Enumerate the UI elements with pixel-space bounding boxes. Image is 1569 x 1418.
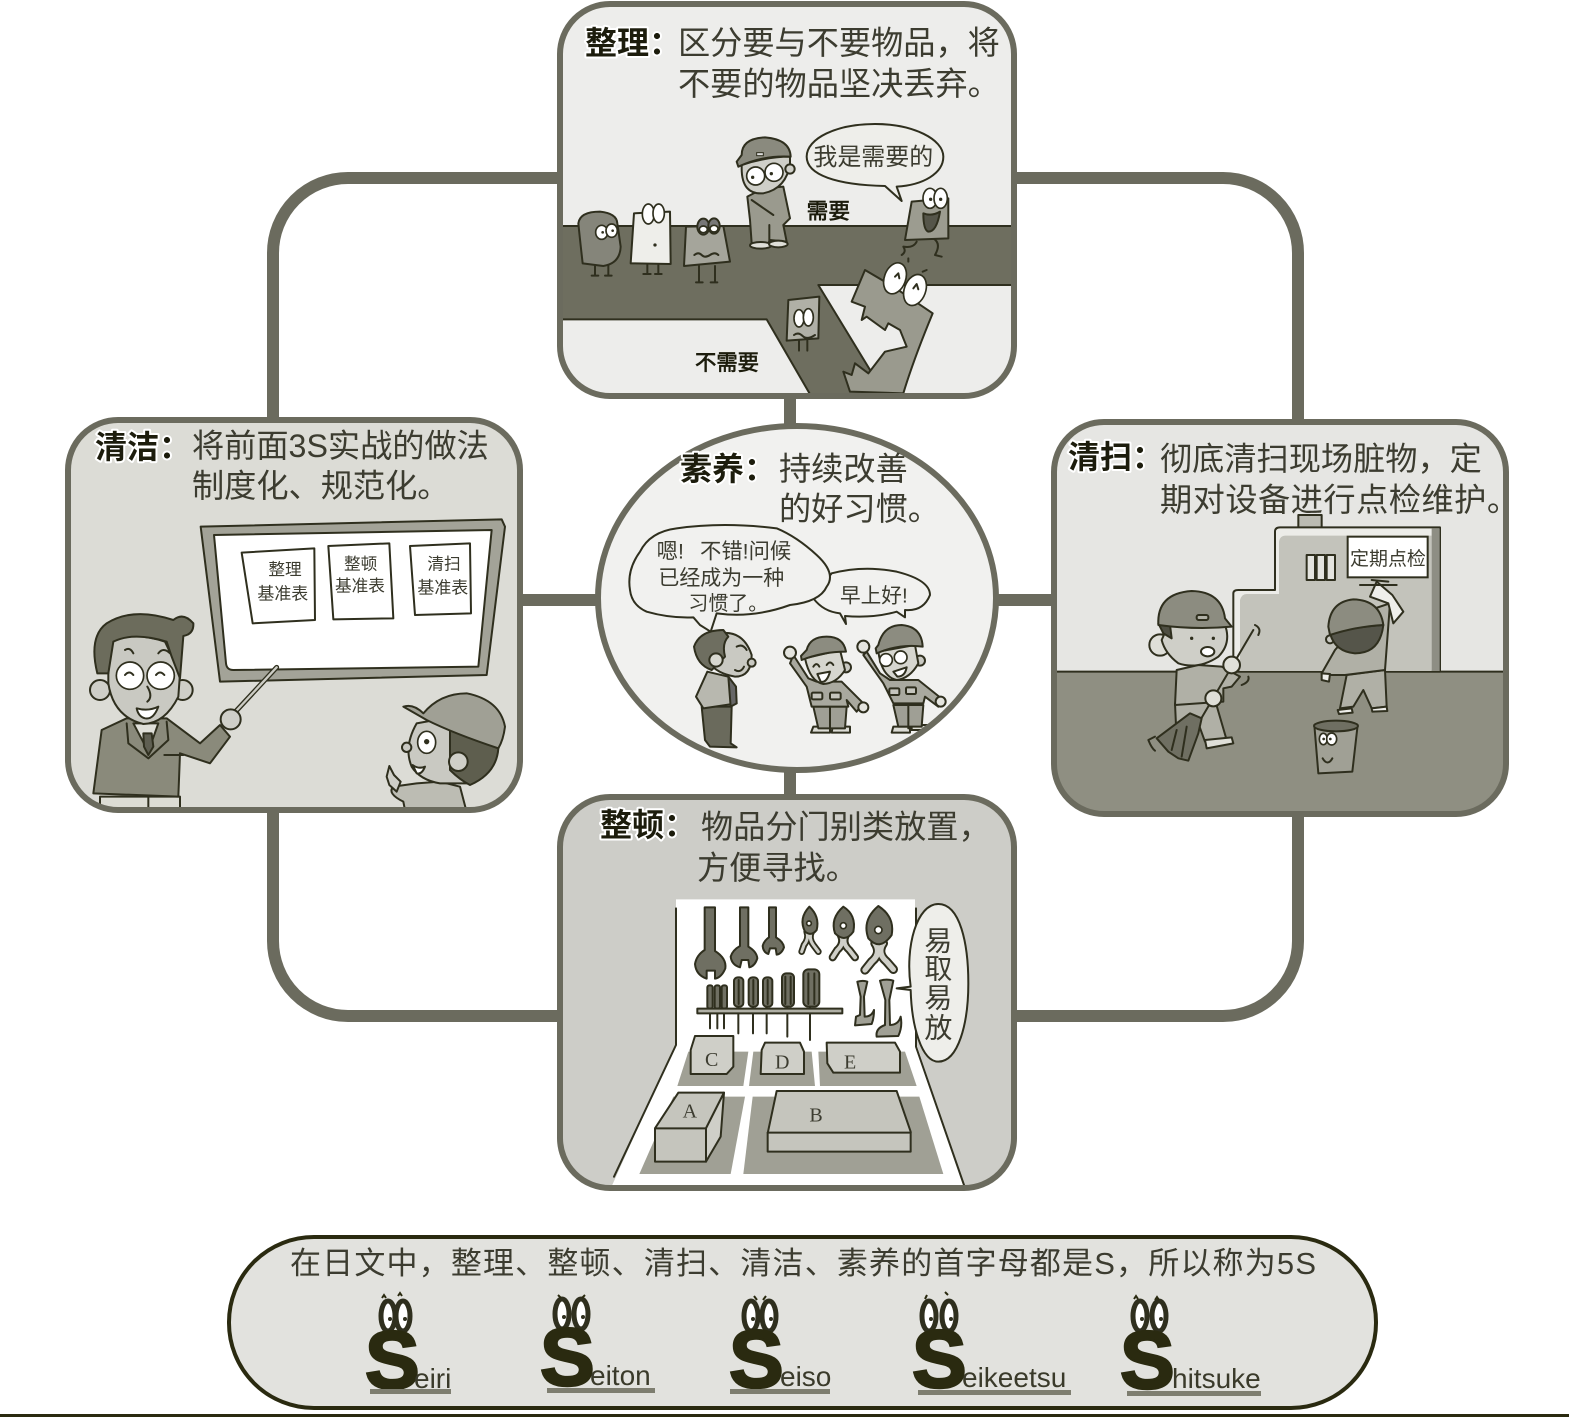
pliers <box>802 906 893 970</box>
text: standardize description: 制度化、规范化。 <box>192 468 450 504</box>
text: explanation sentence: 在日文中，整理、整顿、清扫、清洁、素养的首字母都是S，所以称为5S <box>290 1246 1316 1281</box>
label: 不需要: 不需要 <box>695 351 759 375</box>
speech bubble: 易取易放: 易 <box>924 982 952 1013</box>
text: discipline description: 的好习惯。 <box>779 491 940 527</box>
illustration: sorting road with characters <box>557 124 1023 400</box>
panel: 5S explanation pill <box>229 1237 1376 1408</box>
storage area C <box>677 1036 748 1086</box>
heading: 清扫: 清扫： <box>1068 439 1164 475</box>
speech bubble: 嗯！不错！: 习惯了。 <box>688 592 768 615</box>
sheet: 清扫基准表: 基准表 <box>417 578 468 597</box>
mascot: Seiso: S <box>729 1314 784 1405</box>
storage area D: D <box>775 1051 789 1073</box>
text: clean description <box>1160 441 1520 518</box>
sheet: 整顿基准表 <box>328 543 393 619</box>
connecting ring <box>273 178 1298 1016</box>
storage area D <box>749 1043 815 1086</box>
hammers <box>855 980 901 1037</box>
text: sort description: 不要的物品坚决丢弃。 <box>678 66 1000 102</box>
mascot: Seiri: S <box>365 1315 420 1406</box>
mascot: Shitsuke <box>1120 1296 1261 1406</box>
illustration: tool wall and storage areas <box>610 899 968 1190</box>
mascot: Seiri: eiri <box>414 1363 451 1394</box>
mascot: Seiton: eiton <box>590 1360 651 1391</box>
mascot: Seiton: S <box>540 1312 595 1403</box>
mascot: Seiri <box>365 1293 451 1406</box>
mascot: Seikeetsu: S <box>912 1314 967 1405</box>
sheet: 整顿基准表: 整顿 <box>344 554 378 573</box>
item: box with wavy mouth <box>684 218 730 282</box>
label: 需要: 需要 <box>807 198 850 223</box>
storage area E <box>818 1043 917 1086</box>
sheet: 整理基准表: 基准表 <box>257 584 308 603</box>
heading: 素养: 素养： <box>680 451 776 487</box>
mascot: Seiso: eiso <box>780 1361 831 1392</box>
panel: 清扫 (clean) <box>1052 422 1520 818</box>
speech bubble: 易取易放: 放 <box>924 1012 952 1043</box>
sign: 定期点检: 定期点检 <box>1350 548 1426 570</box>
figure: worker sweeping <box>1148 591 1259 761</box>
text: sort description <box>678 25 1000 102</box>
panel: 素养 (discipline, centre circle) <box>598 426 996 770</box>
speech bubble: 嗯！不错！ <box>629 525 830 632</box>
mascot: Shitsuke: hitsuke <box>1172 1363 1261 1394</box>
text: clean description: 期对设备进行点检维护。 <box>1160 482 1520 518</box>
item: happy needed document <box>902 188 948 257</box>
speech bubble: 易取易放: 取 <box>924 953 952 984</box>
text: discipline description: 持续改善 <box>779 451 908 487</box>
figure: worker wiping <box>1322 580 1403 714</box>
panel: 清洁 (standardize) <box>68 420 520 818</box>
sheet: 清扫基准表 <box>410 543 471 615</box>
storage area B <box>743 1091 943 1174</box>
heading: 整理: 整理： <box>585 25 681 61</box>
text: discipline description <box>779 451 940 527</box>
illustration: greeting scene <box>629 525 946 747</box>
speech bubble: 易取易放: 易 <box>924 926 952 957</box>
item: big torn document <box>843 258 933 393</box>
wrenches <box>695 907 784 979</box>
machine with inspection sign <box>1233 515 1440 672</box>
bucket with face <box>1314 721 1358 773</box>
speech bubble: 早上好: 早上好! <box>840 585 908 608</box>
sheet: 整理基准表 <box>242 548 315 623</box>
speech bubble: 嗯！不错！: 已经成为一种 <box>658 567 784 590</box>
storage area B: B <box>809 1105 823 1127</box>
text: standardize description <box>192 428 489 504</box>
item: small scared document <box>787 297 819 351</box>
speech bubble: 嗯！不错！: 嗯! <box>657 539 684 563</box>
text: clean description: 彻底清扫现场脏物，定 <box>1160 441 1482 477</box>
storage area E: E <box>844 1051 856 1073</box>
notice board <box>201 519 505 682</box>
figure: worker with cap <box>387 693 505 818</box>
mascot: Seiso <box>729 1296 831 1405</box>
screwdrivers on rack <box>697 969 842 1040</box>
text: set-in-order description: 物品分门别类放置， <box>701 809 991 845</box>
speech bubble: 我是需要的 <box>807 124 943 201</box>
heading: 整顿: 整顿： <box>600 807 696 843</box>
storage area C: C <box>705 1049 718 1071</box>
item: rock <box>578 212 621 276</box>
figure: manager with pointer <box>90 614 277 817</box>
panel: 整理 (sort) <box>557 4 1023 400</box>
sign: 定期点检 <box>1348 537 1428 577</box>
sheet: 整顿基准表: 基准表 <box>335 577 385 596</box>
speech bubble: 早上好 <box>813 569 930 624</box>
storage area A <box>639 1093 745 1174</box>
speech bubble: 嗯！不错！: 不错!问候 <box>700 539 791 563</box>
figure: smiling worker <box>784 637 868 733</box>
speech bubble: 我是需要的: 我是需要的 <box>813 144 933 171</box>
mascot: Seikeetsu: eikeetsu <box>962 1362 1066 1393</box>
speech bubble: 易取易放 <box>897 904 968 1062</box>
figure: worker looking at items <box>737 137 795 249</box>
text: set-in-order description: 方便寻找。 <box>697 850 858 886</box>
item: white paper <box>631 204 671 274</box>
text: set-in-order description <box>697 809 991 886</box>
text: sort description: 区分要与不要物品，将 <box>678 25 1000 61</box>
illustration: sweeping and wiping machine <box>1052 515 1508 818</box>
sheet: 清扫基准表: 清扫 <box>427 554 461 573</box>
mascot: Shitsuke: S <box>1120 1315 1175 1406</box>
mascot: Seikeetsu <box>912 1292 1071 1405</box>
heading: 清洁: 清洁： <box>95 429 191 465</box>
panel: 整顿 (set in order) <box>560 797 1014 1190</box>
figure: worker with glasses <box>857 625 946 733</box>
storage area A: A <box>683 1100 698 1122</box>
sheet: 整理基准表: 整理 <box>268 560 302 579</box>
text: standardize description: 将前面3S实战的做法 <box>192 428 489 464</box>
figure: supervisor <box>694 630 756 747</box>
illustration: manager, board and worker <box>90 519 505 818</box>
mascot: Seiton <box>540 1295 655 1403</box>
